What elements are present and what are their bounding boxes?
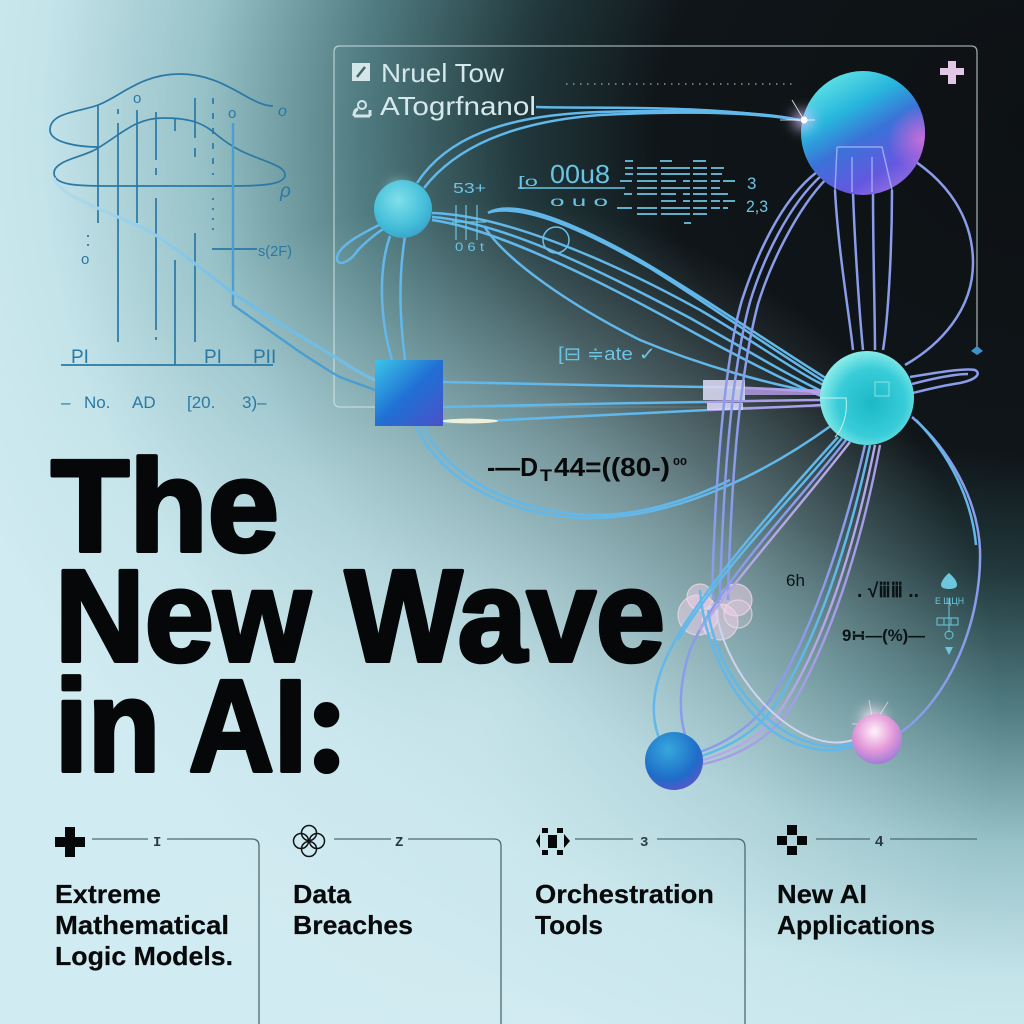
column 1 text: Logic Models. — [55, 941, 233, 971]
chart labels — [61, 90, 292, 412]
formula: upper panel math: o u o — [550, 193, 608, 209]
network curves: top node links — [337, 107, 832, 398]
panel heading line 1: Nruel Tow — [381, 58, 504, 88]
icon: pink plus — [940, 61, 964, 84]
formula: right lower math — [786, 571, 925, 645]
spark on sphere — [780, 100, 815, 129]
formula: equation below panel: T — [540, 466, 553, 485]
icon: small cyan schematic — [935, 573, 964, 655]
chart labels: No. — [84, 393, 110, 412]
chart labels: o — [228, 105, 236, 122]
formula: equation below panel: -—D — [487, 452, 538, 482]
chart labels: PII — [253, 347, 276, 368]
panel: dark glass frame — [334, 46, 983, 407]
dotted rule — [566, 83, 795, 85]
formula: equation below panel: 44=((80-) — [554, 452, 670, 482]
column 2 text: Data — [293, 879, 352, 909]
title: The — [51, 432, 279, 579]
column 1 text: Mathematical — [55, 910, 229, 940]
formula: upper panel math: 00u8 — [550, 159, 610, 189]
network curves: hub to lower nodes — [654, 417, 980, 764]
number 4: 4 — [875, 833, 884, 850]
icon: checker cross — [777, 825, 807, 855]
number 2: Z — [395, 835, 403, 851]
column 4 text: Applications — [777, 910, 935, 940]
sphere: top large node — [780, 71, 925, 195]
formula: equation below panel — [487, 452, 688, 485]
column 1 text — [55, 879, 233, 971]
formula: right lower math: . √ⅲⅲ .. — [857, 580, 919, 602]
formula: upper panel math: 0 6 t — [455, 240, 485, 254]
sphere: pink lower node — [852, 700, 902, 764]
chart labels: o — [81, 251, 89, 268]
chart labels: o — [278, 103, 287, 120]
title: in AI — [55, 652, 307, 799]
title: : — [303, 643, 351, 803]
icon: frame diamond — [971, 346, 983, 355]
sphere: upper left node — [374, 180, 432, 238]
chart labels: PI — [71, 347, 89, 368]
sphere: blue lower node — [645, 732, 703, 790]
column 3: orchestration tools — [535, 828, 745, 1024]
column 3 text — [535, 879, 714, 940]
formula: right lower math: 9∺—(%)— — [842, 626, 925, 645]
square node — [375, 360, 443, 426]
title — [51, 432, 665, 803]
number 1: I — [153, 835, 161, 851]
column 4: new ai applications — [777, 825, 977, 940]
network curves: square to hub — [416, 380, 832, 518]
icon: black plus — [55, 827, 85, 857]
formula: equation below panel: 00 — [673, 457, 688, 468]
icon: small cyan schematic: E ЩЦН — [935, 596, 964, 606]
formula: right lower math: 6h — [786, 571, 805, 590]
column 4 text: New AI — [777, 879, 867, 909]
left chart: bell curves and axis — [50, 74, 375, 412]
number 3: 3 — [640, 835, 648, 851]
chart labels: [20. — [187, 393, 215, 412]
sphere: central hub node — [820, 351, 914, 445]
column 2: data breaches — [293, 826, 501, 1024]
column 3 text: Orchestration — [535, 879, 714, 909]
panel heading line 2: ATogrfnanol — [380, 91, 536, 121]
title: New Wave — [55, 542, 665, 689]
formula: upper panel math: 3 — [747, 174, 756, 193]
column 2 text — [293, 879, 413, 940]
icon: panel check square — [352, 63, 370, 81]
icon: translucent flower node — [678, 584, 752, 640]
formula: upper panel math — [452, 159, 768, 254]
connector blocks — [703, 380, 745, 410]
icon: pixel cluster — [536, 828, 570, 855]
glare on lower line — [442, 418, 498, 424]
column 4 text — [777, 879, 935, 940]
column 1: extreme mathematical logic models — [55, 827, 259, 1024]
chart labels: o — [133, 90, 141, 107]
formula: mid panel label: [⊟ ≑ate ✓ — [558, 344, 656, 364]
icon: panel person — [354, 101, 370, 116]
chart labels: s(2F) — [258, 243, 292, 260]
chart labels: 3)– — [242, 393, 267, 412]
column 3 text: Tools — [535, 910, 603, 940]
column 2 text: Breaches — [293, 910, 413, 940]
column 1 text: Extreme — [55, 879, 161, 909]
chart labels: – — [61, 393, 71, 412]
formula: upper panel math: [o — [518, 173, 538, 189]
chart labels: ρ — [279, 181, 291, 202]
formula: upper panel math: 53+ — [453, 180, 486, 197]
network curves: sphere to hub — [713, 152, 978, 600]
formula: upper panel math: 2,3 — [746, 197, 768, 216]
chart labels: PI — [204, 347, 222, 368]
icon: four circle flower — [294, 826, 324, 856]
chart labels: AD — [132, 393, 156, 412]
